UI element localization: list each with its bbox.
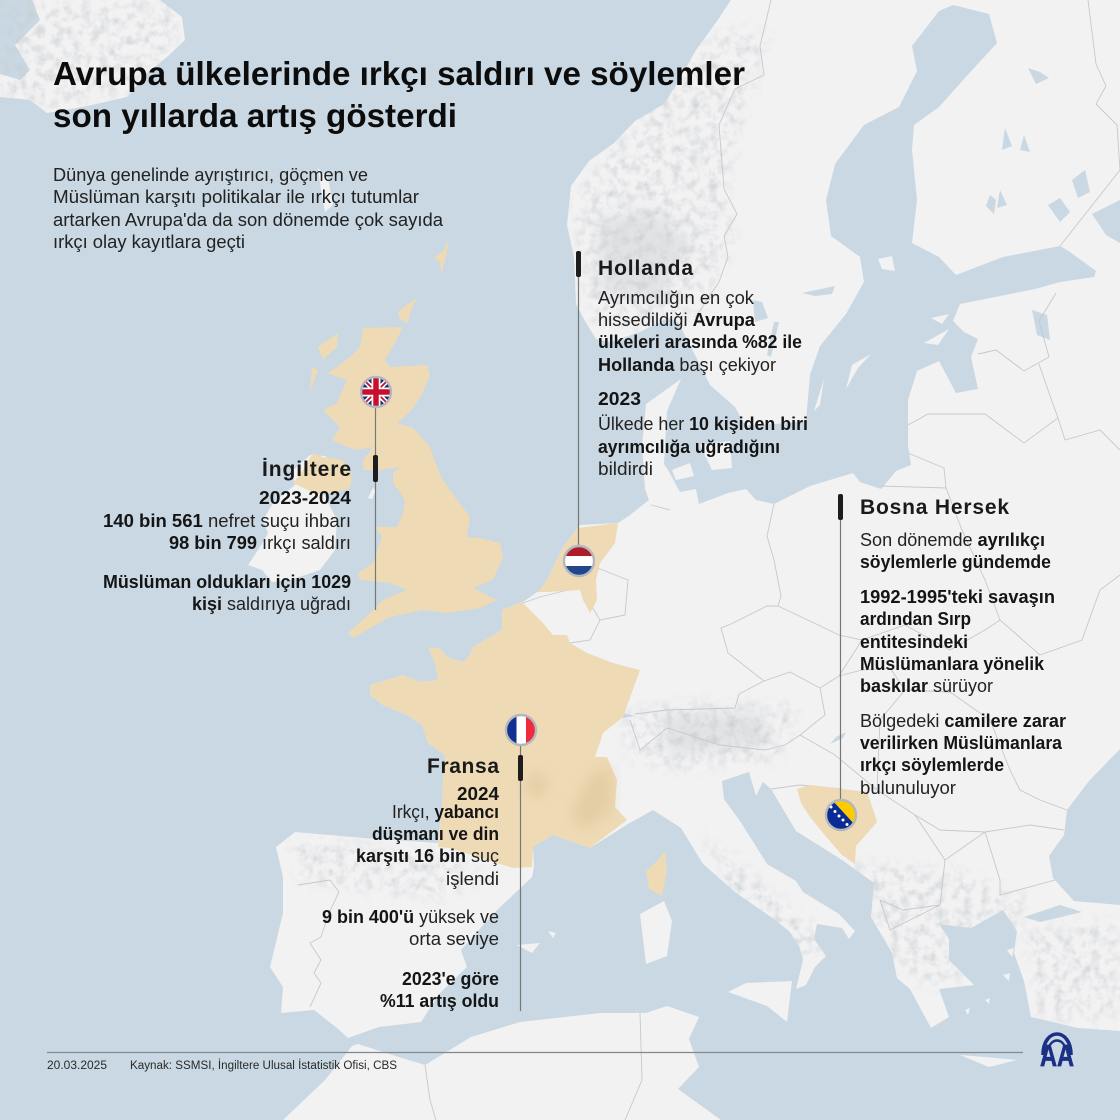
icon: UK flag bbox=[361, 377, 391, 407]
land: Sicily bbox=[728, 981, 792, 1022]
inland waters bbox=[600, 68, 1120, 922]
source: Kaynak: SSMSI, İngiltere Ulusal İstatistik Ofisi, CBS bbox=[130, 1059, 397, 1072]
intro text: Müslüman karşıtı politikalar ile ırkçı tutumlar bbox=[53, 187, 419, 207]
text: Netherlands details: Ülkede her 10 kişiden biri bbox=[598, 414, 808, 434]
title bbox=[53, 56, 745, 135]
marker: UK leader line bbox=[373, 406, 378, 610]
heading: Hollanda: Hollanda bbox=[598, 257, 693, 280]
heading: İngiltere: İngiltere bbox=[262, 458, 351, 481]
land: Sardinia bbox=[640, 901, 672, 964]
text: Netherlands details: 2023 bbox=[598, 389, 641, 409]
highlighted country: Bosnia and Herzegovina bbox=[797, 785, 877, 864]
land: Iceland bbox=[0, 0, 185, 113]
text: Bosnia details: baskılar sürüyor bbox=[860, 676, 993, 696]
text: UK details bbox=[103, 488, 351, 614]
intro text: artarken Avrupa'da da son dönemde çok sayıda bbox=[53, 210, 444, 230]
intro text: ırkçı olay kayıtlara geçti bbox=[53, 232, 245, 252]
marker: Bosnia leader line bbox=[838, 494, 843, 800]
land: Faroe and Isle of Man bbox=[318, 168, 376, 499]
highlighted country: France bbox=[370, 602, 640, 868]
date: 20.03.2025 bbox=[47, 1060, 107, 1072]
text: France details: %11 artış oldu bbox=[380, 991, 499, 1011]
text: Netherlands details: Ayrımcılığın en çok bbox=[598, 288, 755, 308]
marker: France leader line bbox=[518, 746, 523, 1011]
text: UK details: 98 bin 799 ırkçı saldırı bbox=[169, 533, 351, 553]
icon: Netherlands flag bbox=[564, 546, 594, 576]
text: France details: orta seviye bbox=[409, 929, 499, 949]
text: France details: Irkçı, yabancı bbox=[392, 802, 499, 822]
land: Balearic islands bbox=[517, 931, 556, 953]
marker: Netherlands leader line bbox=[576, 251, 581, 546]
text: UK details: Müslüman oldukları için 1029 bbox=[103, 572, 351, 592]
highlighted country: Netherlands bbox=[538, 523, 618, 613]
text: Bosnia details: 1992-1995'teki savaşın bbox=[860, 587, 1055, 607]
highlighted country: Corsica bbox=[646, 851, 667, 896]
text: France details: 2024 bbox=[457, 784, 499, 804]
alpine shading on France bbox=[525, 765, 612, 830]
heading: Bosna Hersek: Bosna Hersek bbox=[860, 496, 1009, 519]
text: Bosnia details bbox=[860, 530, 1066, 798]
land: Aegean islands bbox=[965, 948, 1014, 1015]
panel: Netherlands bbox=[564, 251, 808, 576]
intro text bbox=[53, 165, 444, 252]
land: Crete bbox=[960, 1055, 1017, 1067]
text: UK details: 140 bin 561 nefret suçu ihbarı bbox=[103, 511, 351, 531]
text: UK details: 2023-2024 bbox=[259, 488, 351, 508]
map: borders bbox=[298, 0, 1120, 1120]
text: Bosnia details: Bölgedeki camilere zarar bbox=[860, 711, 1066, 731]
text: France details: düşmanı ve din bbox=[372, 824, 499, 844]
text: France details: 2023'e göre bbox=[402, 969, 499, 989]
logo: AA bbox=[1040, 1034, 1074, 1073]
icon: France flag bbox=[506, 715, 536, 745]
title: Avrupa ülkelerinde ırkçı saldırı ve söylemler bbox=[53, 56, 745, 93]
text: Bosnia details: söylemlerle gündemde bbox=[860, 552, 1051, 572]
text: Netherlands details: Hollanda başı çekiyor bbox=[598, 355, 776, 375]
text: Bosnia details: entitesindeki bbox=[860, 632, 968, 652]
text: Bosnia details: Müslümanlara yönelik bbox=[860, 654, 1045, 674]
text: France details bbox=[322, 784, 499, 1011]
text: Bosnia details: verilirken Müslümanlara bbox=[860, 733, 1063, 753]
text: Netherlands details: hissedildiği Avrupa bbox=[598, 310, 756, 330]
text: France details: karşıtı 16 bin suç bbox=[356, 846, 499, 866]
text: Bosnia details: bulunuluyor bbox=[860, 778, 956, 798]
text: Bosnia details: ardından Sırp bbox=[860, 609, 971, 629]
text: Bosnia details: Son dönemde ayrılıkçı bbox=[860, 530, 1045, 550]
highlighted country: United Kingdom bbox=[293, 238, 503, 638]
land: North Africa bbox=[283, 1006, 721, 1120]
icon: Bosnia flag bbox=[826, 800, 856, 830]
title: son yıllarda artış gösterdi bbox=[53, 98, 457, 135]
text: Netherlands details: bildirdi bbox=[598, 459, 653, 479]
text: Netherlands details: ayrımcılığa uğradığını bbox=[598, 437, 780, 457]
text: France details: 9 bin 400'ü yüksek ve bbox=[322, 907, 499, 927]
text: Bosnia details: ırkçı söylemlerde bbox=[860, 755, 1004, 775]
text: UK details: kişi saldırıya uğradı bbox=[192, 594, 351, 614]
text: Netherlands details bbox=[598, 288, 808, 479]
panel: United Kingdom bbox=[103, 377, 391, 614]
heading: Fransa: Fransa bbox=[427, 755, 499, 778]
footer bbox=[47, 1052, 1023, 1072]
text: Netherlands details: ülkeleri arasında %82 ile bbox=[598, 332, 802, 352]
land: Baltic islands bbox=[672, 256, 949, 480]
panel: Bosnia and Herzegovina bbox=[826, 494, 1066, 830]
logo: AA: AA bbox=[1040, 1038, 1074, 1073]
panel: France bbox=[322, 715, 536, 1011]
text: France details: işlendi bbox=[446, 869, 499, 889]
intro text: Dünya genelinde ayrıştırıcı, göçmen ve bbox=[53, 165, 368, 185]
